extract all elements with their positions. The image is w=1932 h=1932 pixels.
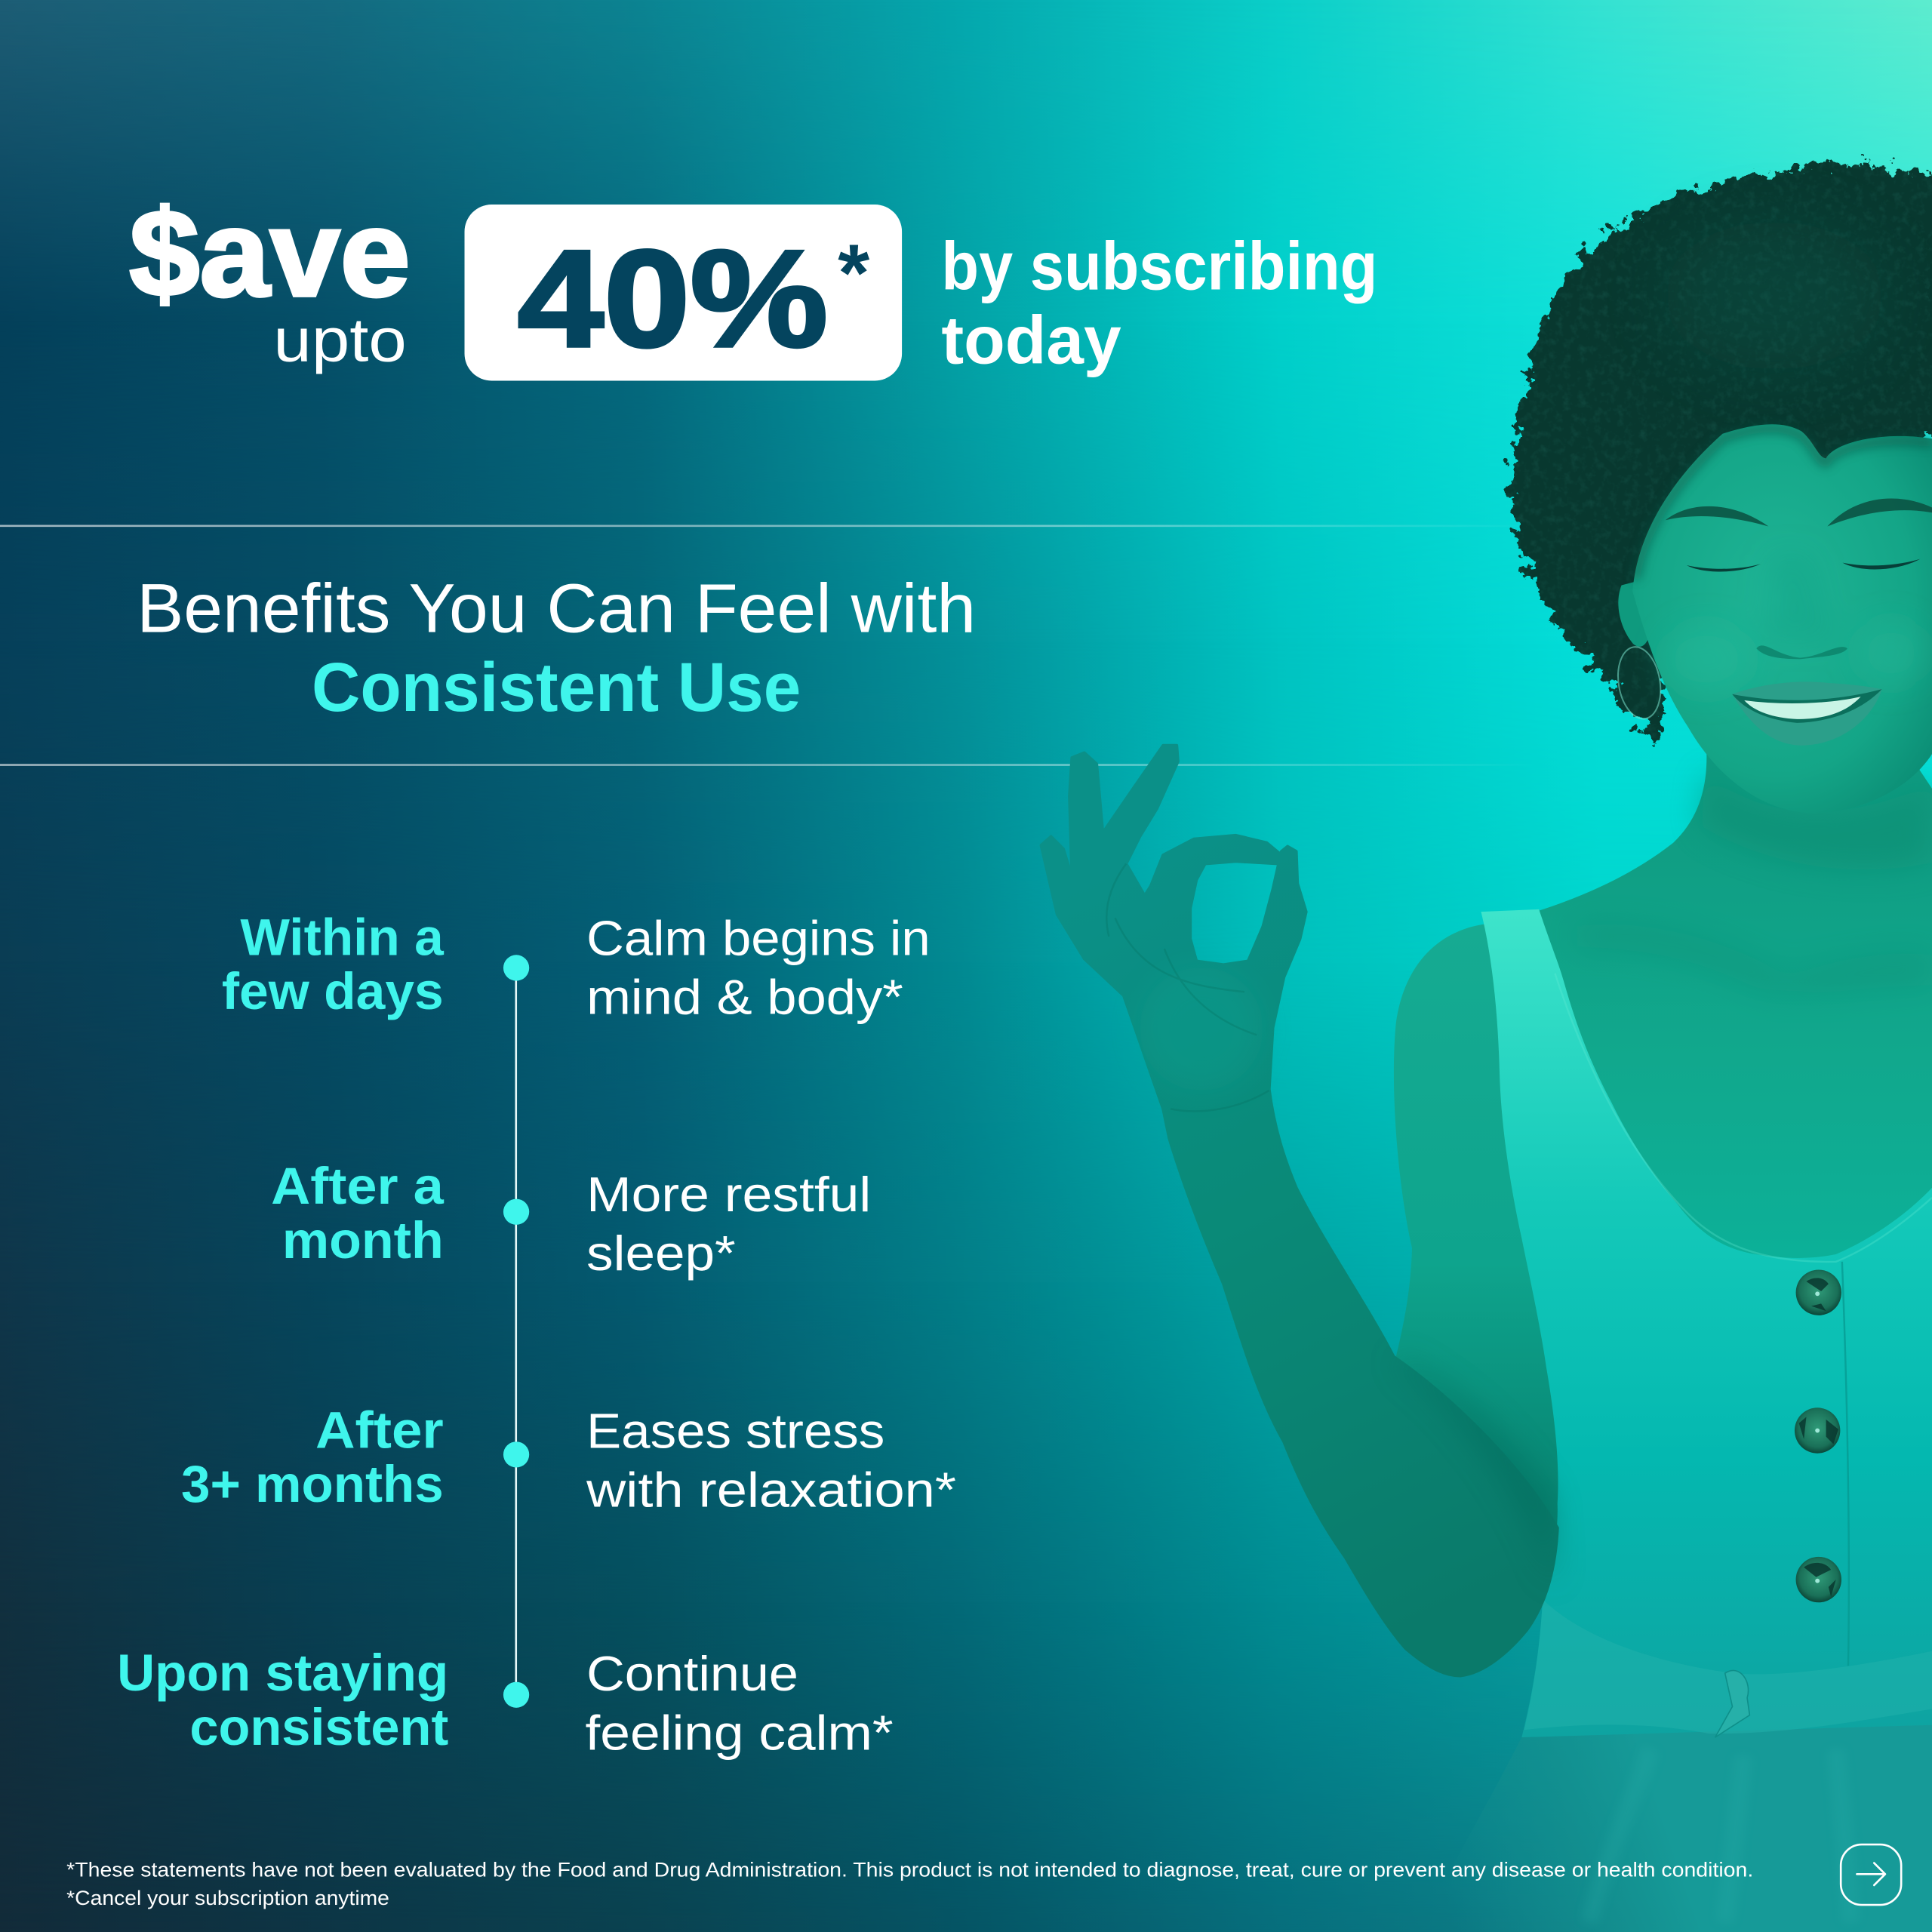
badge: 40%: 40% <box>518 221 828 376</box>
timeline benefits <box>586 910 956 1760</box>
timeline labels: After a <box>271 1157 445 1215</box>
badge: 40%: * <box>838 226 869 318</box>
dress belt <box>1524 1599 1932 1734</box>
timeline benefits: Calm begins in <box>586 910 931 965</box>
timeline benefits: mind & body* <box>586 970 903 1025</box>
button one <box>1796 1269 1841 1315</box>
timeline labels <box>117 908 448 1756</box>
ear <box>1618 579 1651 647</box>
heading: by subscribing today: by subscribing <box>941 229 1377 305</box>
timeline <box>503 955 529 1708</box>
elbow crease shadow <box>1398 1355 1555 1589</box>
forearm and hand <box>1041 746 1558 1675</box>
footnotes: *Cancel your subscription anytime <box>66 1887 389 1909</box>
belt knot <box>1715 1670 1749 1737</box>
timeline labels: few days <box>222 962 444 1020</box>
timeline dots <box>503 955 529 1708</box>
closed eyes <box>1687 564 1761 571</box>
hand palm highlight <box>1140 968 1263 1091</box>
illustration: woman meditating <box>1041 165 1932 1932</box>
timeline benefits: sleep* <box>586 1226 736 1281</box>
face <box>1632 424 1932 814</box>
timeline benefits: Continue <box>586 1646 798 1701</box>
section title: Consistent Use <box>312 649 801 726</box>
nose <box>1756 645 1847 659</box>
heading: by subscribing today: today <box>941 303 1121 379</box>
timeline labels: month <box>282 1211 444 1269</box>
timeline labels: 3+ months <box>181 1455 444 1513</box>
button three <box>1796 1557 1841 1602</box>
footnotes <box>66 1859 1753 1909</box>
earring <box>1613 644 1666 722</box>
timeline labels: Upon staying <box>117 1644 448 1702</box>
timeline benefits: feeling calm* <box>586 1705 894 1760</box>
hand creases <box>1106 863 1269 1111</box>
section title <box>137 571 976 726</box>
hair edge filler <box>1897 185 1932 431</box>
heading: by subscribing today <box>941 229 1377 379</box>
badge: 40% <box>465 205 902 380</box>
neckline seam <box>1555 974 1932 1262</box>
hairline shadow <box>1636 429 1932 579</box>
cheek and nose highlights <box>1663 555 1926 694</box>
divider line top <box>0 525 1534 527</box>
neck shadow <box>1700 770 1932 869</box>
footnotes: *These statements have not been evaluated by the Food and Drug Administration. This product is not intended to diagnose, treat, cure or prevent any disease or health condition. <box>66 1859 1753 1881</box>
mouth opening <box>1732 689 1882 723</box>
timeline benefits: with relaxation* <box>586 1463 956 1518</box>
upper arm <box>1394 924 1564 1527</box>
section title: Benefits You Can Feel with <box>137 571 976 648</box>
icon: next arrow button <box>1841 1844 1901 1905</box>
lips <box>1732 681 1882 746</box>
timeline labels: consistent <box>189 1698 448 1756</box>
timeline labels: Within a <box>240 908 445 966</box>
hair highlight <box>1663 222 1885 370</box>
heading: save upto: $ave <box>129 184 411 322</box>
timeline benefits: Eases stress <box>586 1403 884 1458</box>
timeline line <box>515 968 517 1694</box>
dress placket <box>1842 1262 1849 1666</box>
collarbone shading <box>1577 923 1932 994</box>
facial features <box>1613 499 1932 746</box>
divider line bottom <box>0 764 1534 766</box>
heading: save upto: upto <box>273 306 407 374</box>
skirt folds <box>1589 1749 1850 1922</box>
button two <box>1795 1407 1840 1454</box>
teeth <box>1744 697 1861 719</box>
eyebrows <box>1666 506 1768 527</box>
timeline benefits: More restful <box>586 1167 871 1222</box>
skirt <box>1417 1700 1932 1932</box>
dress bodice <box>1481 909 1932 1737</box>
hair <box>1511 165 1932 742</box>
timeline labels: After <box>315 1401 444 1459</box>
neck and chest <box>1527 752 1932 1281</box>
